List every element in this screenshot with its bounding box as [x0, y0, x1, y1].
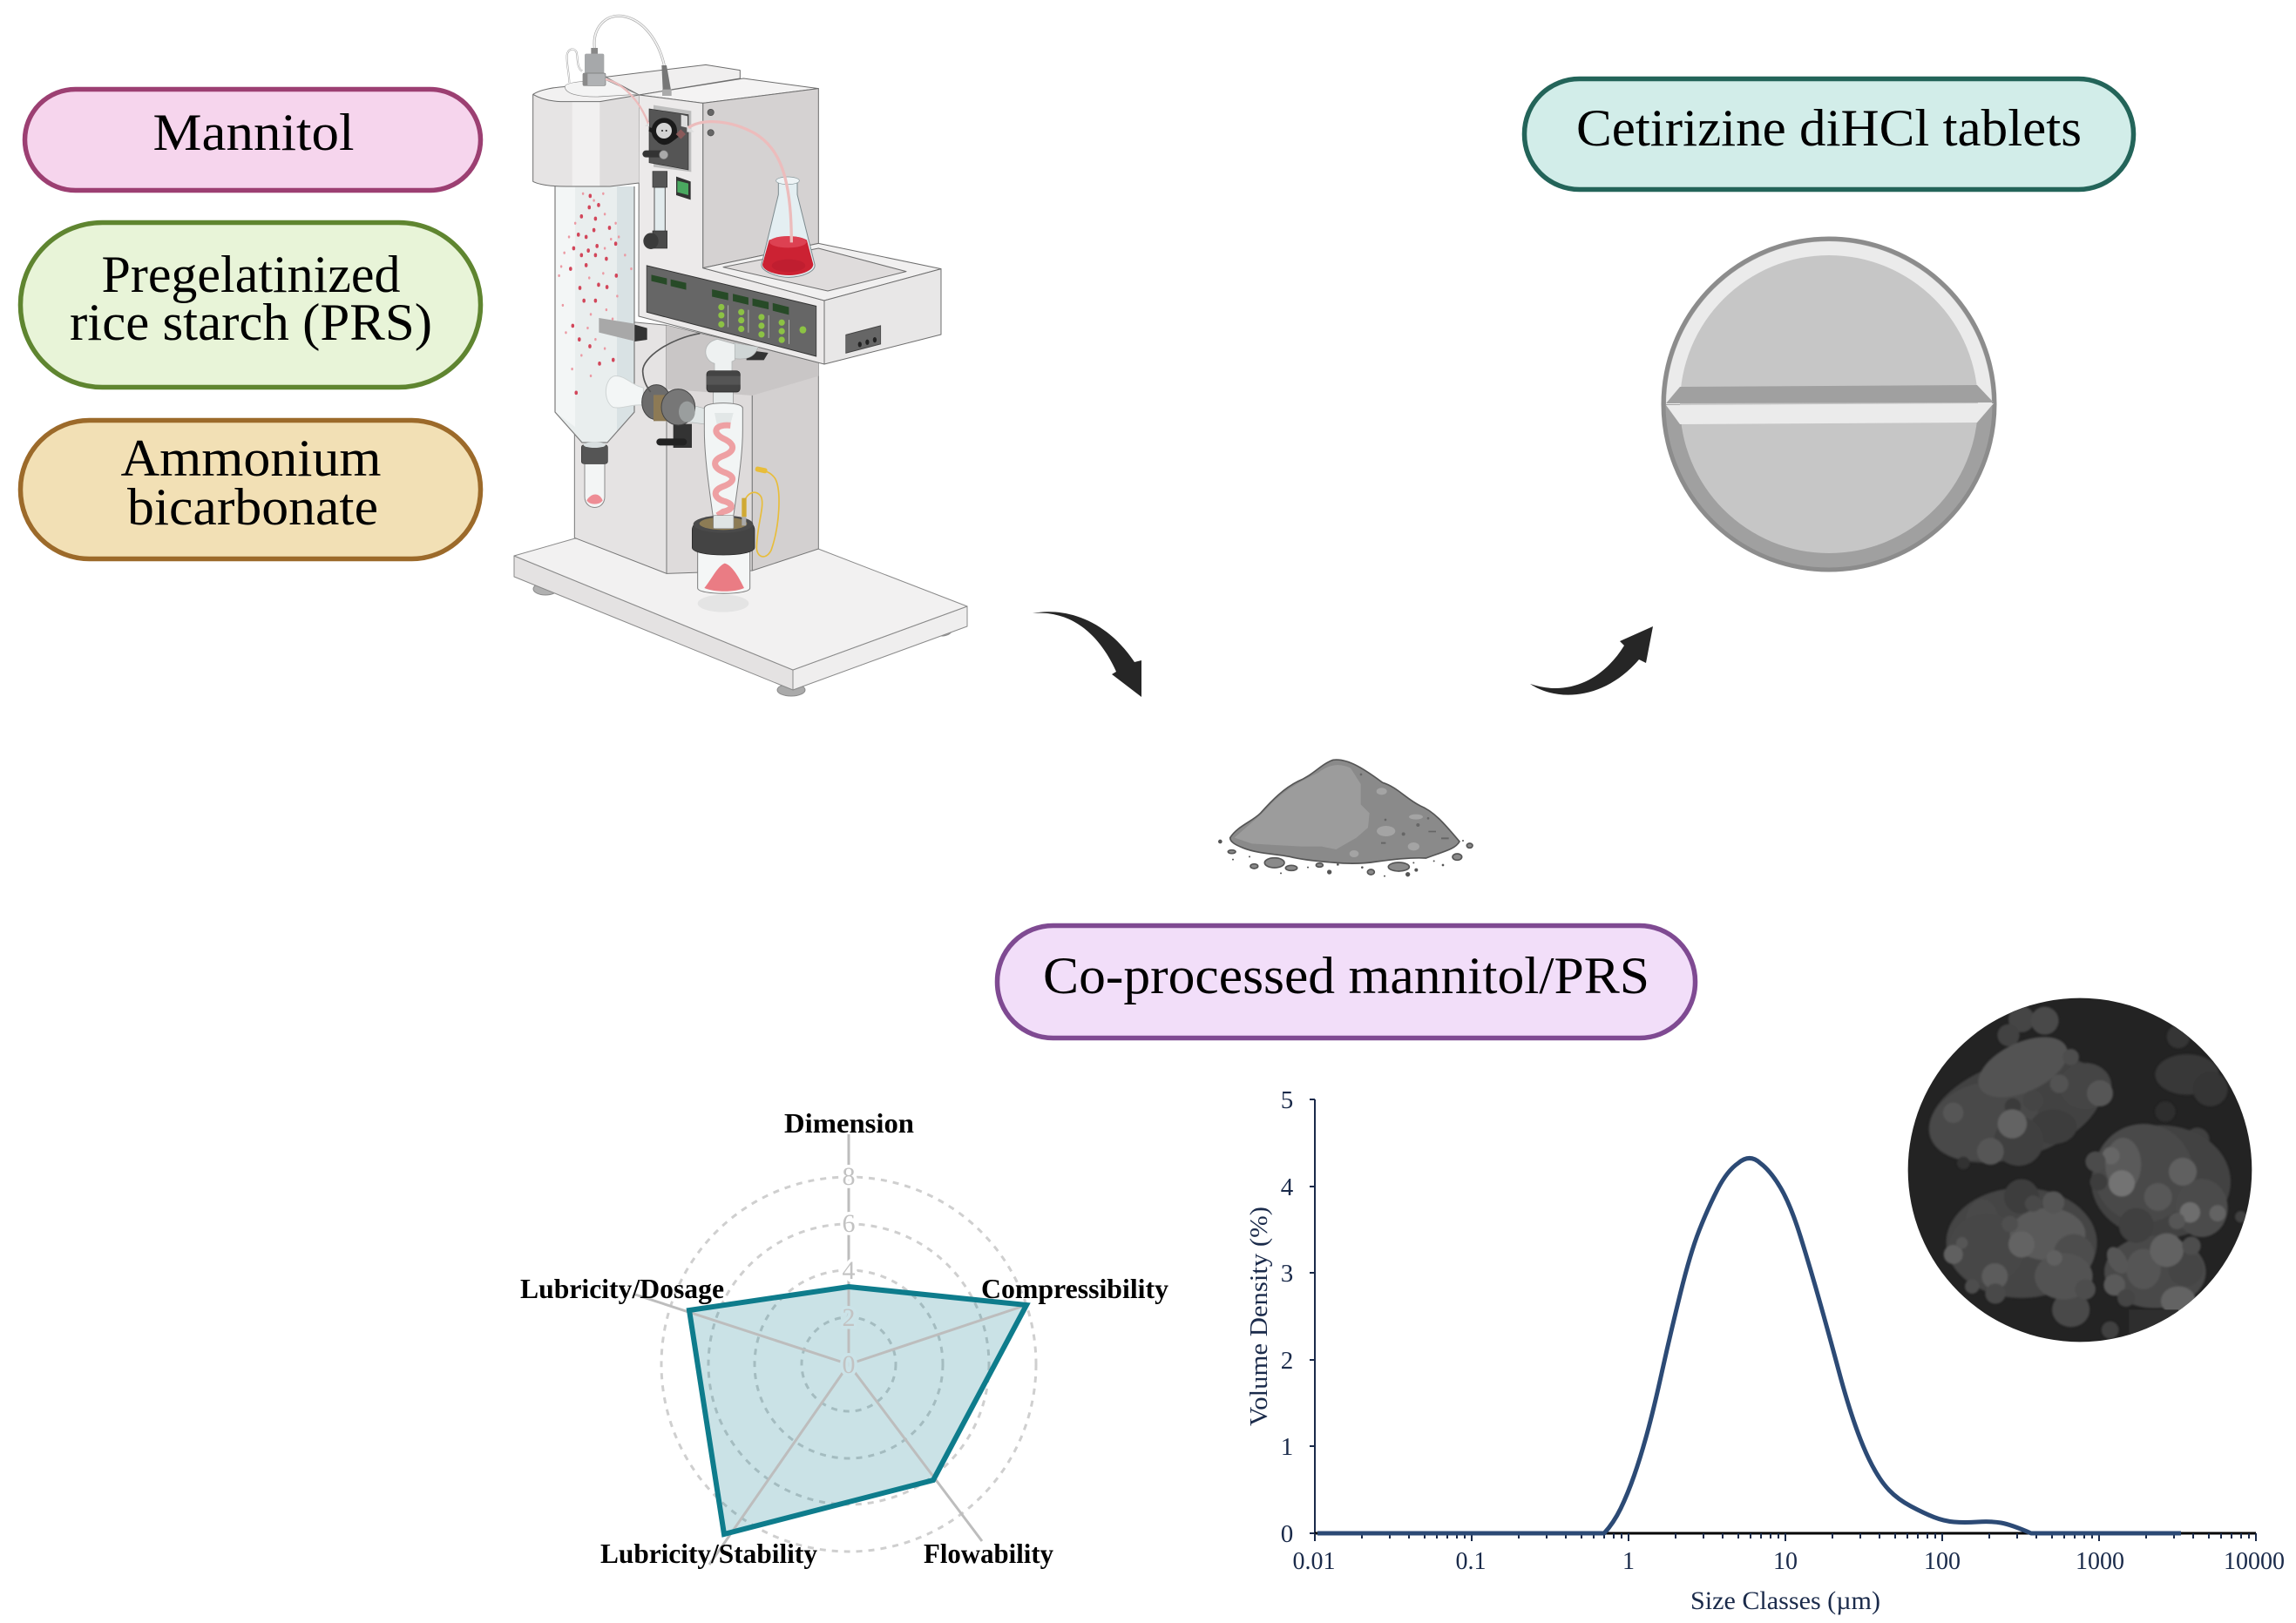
radar scale labels: 4 [842, 1256, 856, 1285]
feed and air tubes [567, 16, 672, 96]
radar axis labels: Dimension [784, 1107, 914, 1139]
y tick labels: 1 [1281, 1433, 1293, 1461]
x tick labels: 10 [1773, 1548, 1798, 1575]
radar axis labels: Flowability [924, 1538, 1053, 1569]
pink feed tubing [606, 79, 791, 242]
pill: Cetirizine diHCl tablets [1525, 78, 2133, 190]
screws [708, 109, 714, 136]
radar scale labels: 8 [842, 1162, 856, 1191]
y axis title: Volume Density (%) [1245, 1207, 1273, 1426]
blower cable [643, 334, 700, 392]
radar axes [635, 1134, 1026, 1565]
control panel [647, 266, 881, 356]
pill: Pregelatinized rice starch [21, 223, 481, 387]
pill: Pregelatinized rice starch: rice starch (PRS) [70, 294, 432, 351]
radar axis labels: Lubricity/Stability [600, 1538, 817, 1569]
radar axis labels [520, 1107, 1168, 1569]
connecting pipe [642, 385, 715, 448]
SEM micrograph [1908, 998, 2252, 1342]
y tick labels: 0 [1281, 1520, 1293, 1548]
pump head [642, 105, 694, 172]
radar outline [689, 1287, 1026, 1534]
icon: powder pile [1218, 760, 1473, 877]
tower column [574, 316, 818, 573]
radar axis labels: Compressibility [981, 1273, 1168, 1304]
cyclone with spiral [704, 403, 742, 517]
flask with red solution [762, 177, 815, 277]
chart axes and ticks [1310, 1099, 2256, 1541]
radar scale labels: 6 [842, 1209, 856, 1238]
pill: Cetirizine diHCl tablets: Cetirizine diHCl tablets [1576, 99, 2082, 157]
elbow above cyclone [706, 339, 769, 407]
x tick labels [1293, 1548, 2285, 1575]
pill: Mannitol [24, 89, 481, 190]
pill: Co-processed mannitol/PRS: Co-processed mannitol/PRS [1043, 947, 1649, 1004]
x tick labels: 10000 [2224, 1548, 2285, 1575]
radar scale labels: 0 [842, 1350, 856, 1379]
x axis title: Size Classes (µm) [1690, 1586, 1880, 1615]
radar scale labels [842, 1162, 856, 1379]
power switch [676, 177, 691, 199]
radar rings [661, 1177, 1036, 1552]
flow meter [643, 172, 667, 249]
radar scale labels: 2 [842, 1303, 856, 1332]
lower glassware [581, 318, 779, 612]
glass elbow bulb [606, 376, 643, 408]
pill: Ammonium bicarbonate: bicarbonate [127, 478, 378, 536]
x tick labels: 0.01 [1293, 1548, 1335, 1575]
y tick labels: 3 [1281, 1260, 1293, 1288]
arrow: to powder [1033, 612, 1141, 697]
droplets [559, 193, 632, 393]
arrow: to tablet [1530, 626, 1653, 695]
spray dryer illustration [514, 16, 967, 696]
y tick labels [1281, 1086, 1294, 1548]
x tick labels: 1000 [2076, 1548, 2124, 1575]
pill: Mannitol: Mannitol [153, 104, 354, 161]
upper housing [606, 64, 941, 364]
y tick labels: 5 [1281, 1086, 1293, 1114]
icon: scored tablet [1663, 239, 1995, 570]
pill: Pregelatinized rice starch: Pregelatinized [101, 246, 401, 303]
radar fill [689, 1287, 1026, 1534]
collection tube [581, 442, 607, 507]
base plate [514, 538, 967, 696]
x tick labels: 100 [1924, 1548, 1961, 1575]
radar chart [520, 1107, 1168, 1569]
pill: Co-processed mannitol/PRS [997, 925, 1696, 1038]
tubing and pump [567, 16, 815, 277]
y tick labels: 4 [1281, 1173, 1294, 1201]
y tick labels: 2 [1281, 1347, 1293, 1375]
glass drying chamber [555, 186, 634, 443]
pill: Ammonium bicarbonate [21, 420, 481, 559]
yellow probe cable [742, 466, 779, 557]
particle size distribution chart [1245, 1086, 2285, 1615]
chamber clamp [599, 318, 647, 342]
x tick labels: 0.1 [1455, 1548, 1487, 1575]
chamber top head and nozzle [533, 48, 639, 186]
distribution curve [1317, 1159, 2181, 1533]
x tick labels: 1 [1622, 1548, 1635, 1575]
radar axis labels: Lubricity/Dosage [520, 1273, 724, 1304]
pill: Ammonium bicarbonate: Ammonium [120, 429, 382, 487]
collection jar [692, 516, 755, 612]
